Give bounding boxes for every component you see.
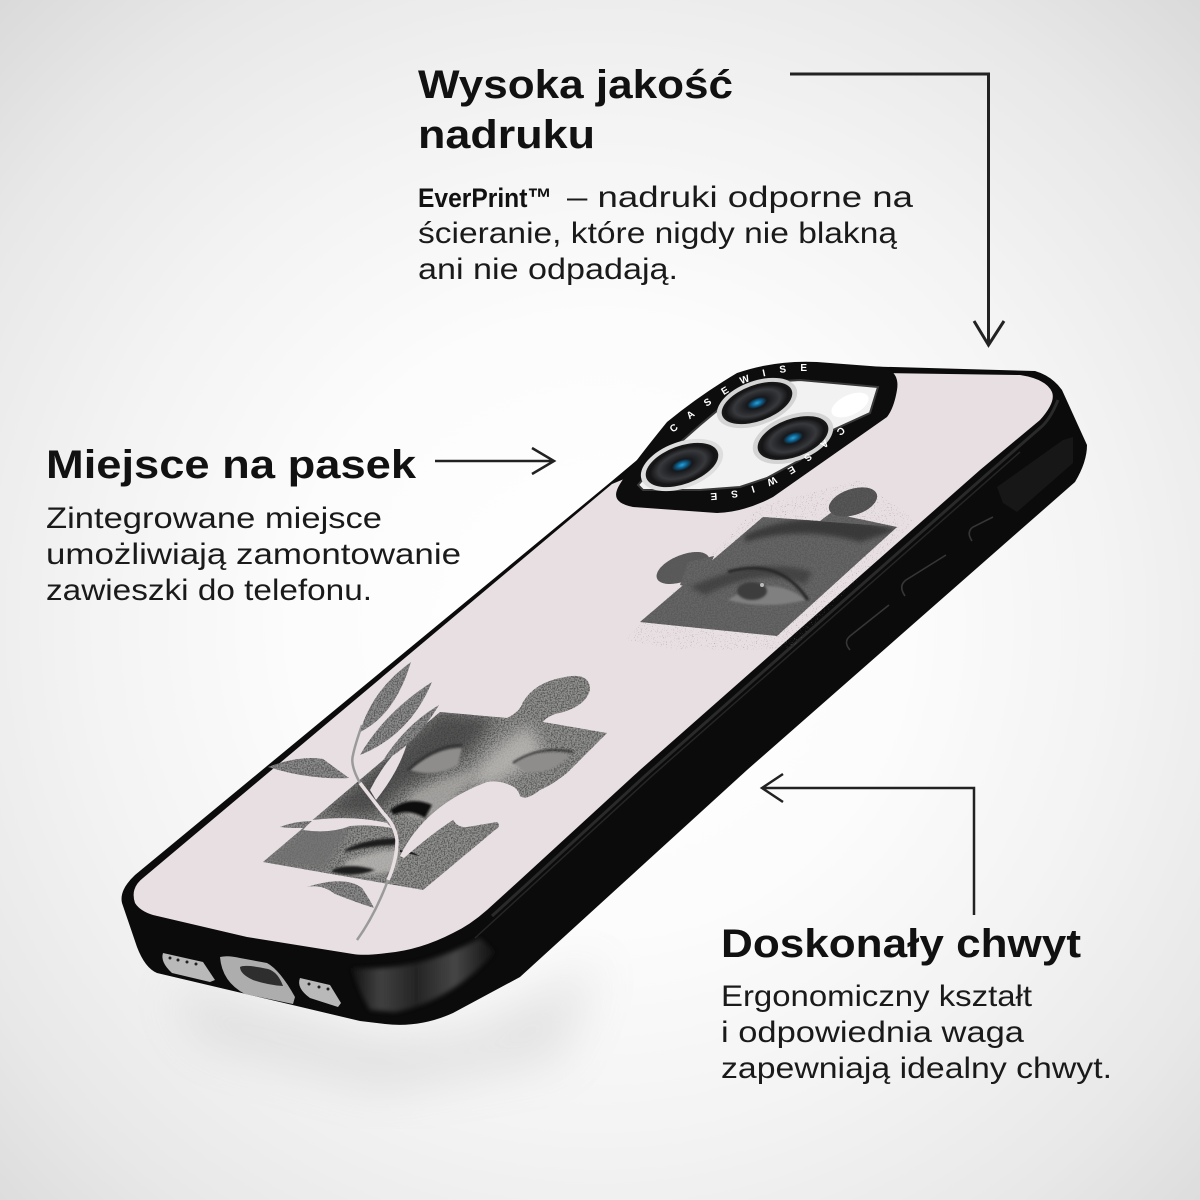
back panel	[134, 373, 1053, 955]
heading: Miejsce na pasek	[46, 443, 417, 487]
face puzzle shape	[263, 676, 607, 890]
pink leaves over print	[303, 740, 487, 858]
leaf stem	[360, 783, 397, 880]
lens top	[710, 368, 804, 438]
grey leaves	[268, 662, 439, 908]
leaf and face puzzle print	[263, 662, 607, 940]
rim text bottom: CASEWISE	[710, 428, 844, 500]
bottom left speaker	[162, 953, 215, 982]
body line 3: zawieszki do telefonu.	[46, 574, 372, 607]
brand name: EverPrint™	[418, 183, 552, 213]
body line 2: umożliwiają zamontowanie	[46, 538, 461, 571]
phone shadow	[170, 960, 600, 1090]
eye puzzle shape	[640, 482, 897, 636]
phone case	[122, 365, 1087, 1025]
corner highlight	[352, 938, 495, 1012]
heading line 2: nadruku	[418, 113, 595, 157]
face shading	[263, 712, 573, 875]
arrow: strap slot	[435, 448, 554, 474]
callout: print quality	[418, 63, 913, 286]
callout: strap slot	[46, 443, 461, 607]
camera module	[616, 362, 898, 513]
case body	[122, 365, 1087, 1025]
charging port	[220, 956, 295, 1004]
body line 2: i odpowiednia waga	[721, 1016, 1024, 1049]
camera bumper	[616, 362, 897, 513]
rim text top: CASEWISE	[670, 364, 807, 432]
bottom right speaker	[299, 978, 341, 1007]
arrow: grip	[762, 774, 974, 915]
body line 1: Zintegrowane miejsce	[46, 502, 382, 535]
camera control	[997, 437, 1073, 512]
heading: Wysoka jakość	[418, 63, 733, 107]
eye puzzle print	[625, 480, 915, 650]
body line 3: ani nie odpadają.	[418, 253, 678, 286]
side inner groove	[475, 452, 1020, 938]
bezel highlight	[492, 400, 1058, 916]
arrow: print quality	[790, 74, 1004, 345]
side buttons	[846, 517, 993, 650]
camera window	[638, 380, 878, 490]
heading: Doskonały chwyt	[721, 922, 1081, 966]
lens right	[746, 402, 840, 474]
speckle	[625, 480, 915, 650]
body line 3: zapewniają idealny chwyt.	[721, 1052, 1112, 1085]
flash	[828, 387, 872, 423]
body line 1: Ergonomiczny kształt	[721, 980, 1033, 1013]
eye details	[690, 519, 897, 605]
body line 1: – nadruki odporne na	[567, 181, 913, 214]
lens left	[634, 429, 730, 501]
callout: grip	[721, 922, 1112, 1085]
body line 2: ścieranie, które nigdy nie blakną	[418, 217, 897, 250]
